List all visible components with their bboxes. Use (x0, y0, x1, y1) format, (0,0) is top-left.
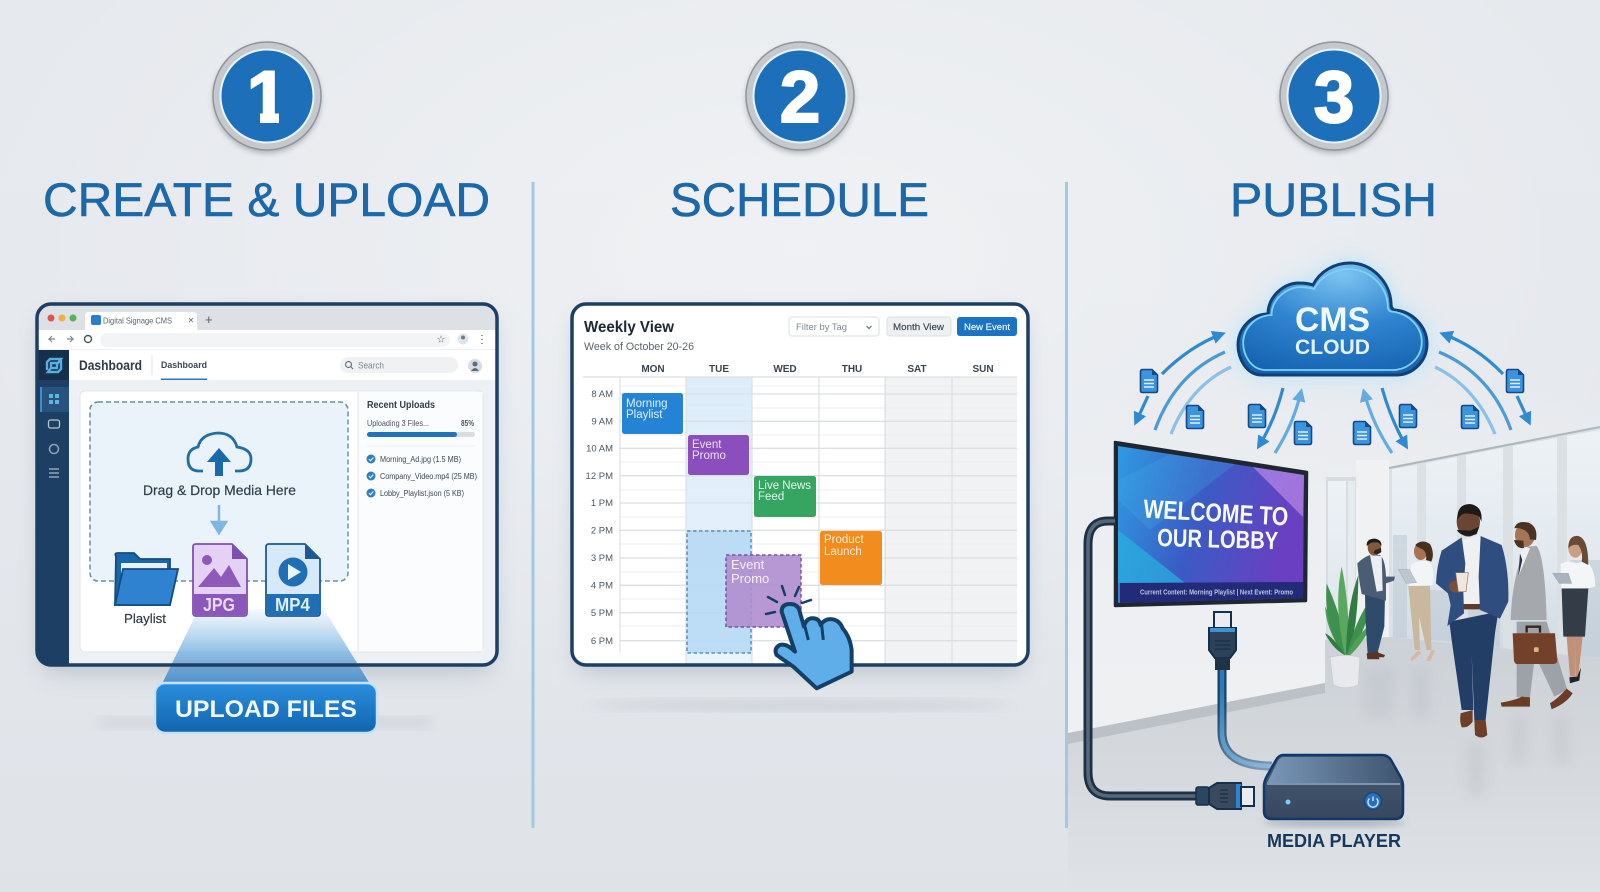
event: live news feed: Feed (758, 491, 784, 503)
calendar window (572, 304, 1028, 688)
badge 3: 3 (1314, 57, 1354, 138)
recent uploads panel: Lobby_Playlist.json (5 KB) (380, 489, 464, 498)
recent uploads panel (358, 392, 482, 651)
event: morning playlist (622, 393, 683, 434)
cable: hdmi to player (1222, 668, 1272, 766)
column fills (686, 377, 1017, 667)
data arrows right (1435, 334, 1529, 434)
event: product launch: Product (824, 534, 864, 546)
event: event promo: Event (692, 439, 722, 451)
lobby screen: OUR LOBBY (1157, 524, 1279, 555)
lobby screen: Current Content: Morning Playlist | Next Event: Promo (1140, 588, 1293, 596)
recent uploads panel: Uploading 3 Files... (367, 418, 429, 428)
dragged event: Event (731, 557, 765, 572)
time labels: 2 PM (591, 526, 613, 536)
badge 2: 2 (780, 57, 820, 138)
left window (1326, 477, 1356, 667)
divider (1065, 182, 1068, 828)
icon: cloud upload (188, 433, 251, 476)
briefcase (1513, 627, 1557, 664)
event: morning playlist: Playlist (626, 409, 663, 421)
floor reflections (1364, 668, 1568, 797)
step 1: create and upload (37, 42, 497, 733)
browser window (37, 304, 497, 684)
day headers: WED (773, 364, 797, 375)
data arrows left (1136, 334, 1231, 434)
content area (69, 380, 497, 665)
heading: create and upload: CREATE & UPLOAD (43, 173, 490, 226)
day headers: SUN (972, 364, 994, 375)
connector: vertical hdmi (1209, 612, 1236, 670)
event: morning playlist: Morning (626, 398, 668, 410)
badge 2 (746, 42, 854, 153)
icon: jpg file (193, 544, 247, 616)
calendar frame (572, 304, 1028, 665)
scene: office lobby photo (1068, 390, 1600, 892)
data arrows centre (1259, 388, 1406, 453)
drop label: Drag & Drop Media Here (143, 482, 296, 498)
time labels: 12 PM (586, 471, 613, 482)
media player label: MEDIA PLAYER (1267, 831, 1401, 851)
cms cloud: CLOUD (1295, 336, 1370, 359)
tab bar: Digital Signage CMS (103, 316, 172, 326)
dashboard header: Dashboard (161, 360, 207, 371)
sidebar (37, 350, 69, 665)
event: live news feed (754, 476, 816, 517)
plant (1325, 567, 1373, 688)
dragged event (726, 555, 801, 627)
day headers: MON (641, 364, 665, 375)
tab bar: + (205, 312, 213, 327)
event: product launch (820, 531, 882, 585)
icon: mp4 file: MP4 (275, 595, 310, 615)
recent uploads panel: 85% (461, 418, 474, 428)
cms cloud (1238, 263, 1427, 375)
time labels (586, 389, 613, 647)
icon: jpg file: JPG (203, 595, 235, 615)
dashboard header: Dashboard (79, 357, 142, 373)
month view button: Month View (893, 322, 944, 333)
main card (80, 391, 483, 652)
heading: schedule: SCHEDULE (670, 173, 929, 226)
pillar (1356, 460, 1389, 660)
icon: pointing hand (776, 604, 852, 688)
event: product launch: Launch (824, 546, 862, 558)
tab bar (37, 304, 497, 330)
click sparks (766, 586, 811, 614)
cms cloud: CMS (1295, 301, 1370, 339)
dragged event: Promo (731, 571, 769, 586)
badge 3 (1280, 42, 1388, 153)
month view button (887, 317, 951, 336)
time labels: 3 PM (591, 553, 613, 564)
step 3: publish (1088, 42, 1529, 851)
calendar subtitle: Week of October 20-26 (584, 341, 694, 353)
time labels: 5 PM (591, 608, 613, 619)
lobby screen (1115, 442, 1307, 606)
arrow down (212, 505, 226, 533)
recent uploads panel: Recent Uploads (367, 400, 435, 411)
content file icons (1140, 370, 1524, 444)
badge 1: 1 (247, 57, 287, 138)
event: event promo (688, 435, 749, 475)
wall (1068, 390, 1600, 750)
divider (532, 182, 534, 828)
day headers: TUE (709, 364, 729, 375)
person: man talking (1357, 539, 1395, 659)
baseboard (1068, 683, 1325, 744)
address bar (38, 333, 496, 350)
connector: horizontal hdmi (1196, 783, 1254, 809)
person: woman right (1553, 536, 1595, 683)
drop target (687, 531, 751, 653)
icon: playlist folder (115, 553, 178, 605)
media player (1262, 755, 1406, 827)
time labels: 9 AM (591, 416, 613, 428)
step 2: schedule (572, 42, 1028, 710)
address bar: ☆ (437, 334, 446, 346)
recent uploads panel: Company_Video.mp4 (25 MB) (380, 472, 477, 481)
badge 1 (213, 42, 321, 153)
dashboard header: Search (358, 360, 384, 370)
person: main man (1436, 504, 1508, 737)
time labels: 6 PM (591, 636, 613, 647)
new event button: New Event (964, 322, 1010, 333)
event: event promo: Promo (692, 450, 726, 462)
drop zone (90, 402, 348, 581)
filter dropdown (789, 317, 879, 336)
dashboard header (69, 350, 497, 380)
heading: publish: PUBLISH (1230, 173, 1437, 226)
day headers: SAT (907, 364, 927, 375)
time labels: 4 PM (591, 580, 613, 592)
cable: screen to player (1088, 521, 1198, 796)
recent uploads panel: Morning_Ad.jpg (1.5 MB) (380, 455, 461, 464)
ground shadow (590, 700, 1010, 710)
calendar title: Weekly View (584, 319, 675, 336)
person: man with briefcase (1501, 522, 1573, 709)
new event button (957, 317, 1017, 336)
large windows (1389, 427, 1600, 659)
day headers (641, 364, 994, 375)
calendar grid (583, 377, 1017, 665)
filter dropdown: Filter by Tag (796, 322, 847, 333)
lobby screen: WELCOME TO (1143, 494, 1289, 532)
browser frame (37, 304, 497, 665)
day headers: THU (842, 364, 862, 375)
floor (1068, 637, 1600, 892)
person: woman with tablet (1398, 542, 1435, 661)
time labels: 8 AM (591, 389, 613, 400)
upload beam (162, 606, 370, 684)
time labels: 10 AM (586, 444, 613, 454)
tab bar: × (188, 316, 194, 326)
upload button (100, 683, 430, 733)
playlist label: Playlist (124, 611, 166, 626)
icon: mp4 file (266, 544, 320, 616)
upload button: UPLOAD FILES (175, 696, 357, 723)
event: live news feed: Live News (758, 480, 811, 492)
time labels: 1 PM (591, 498, 613, 509)
